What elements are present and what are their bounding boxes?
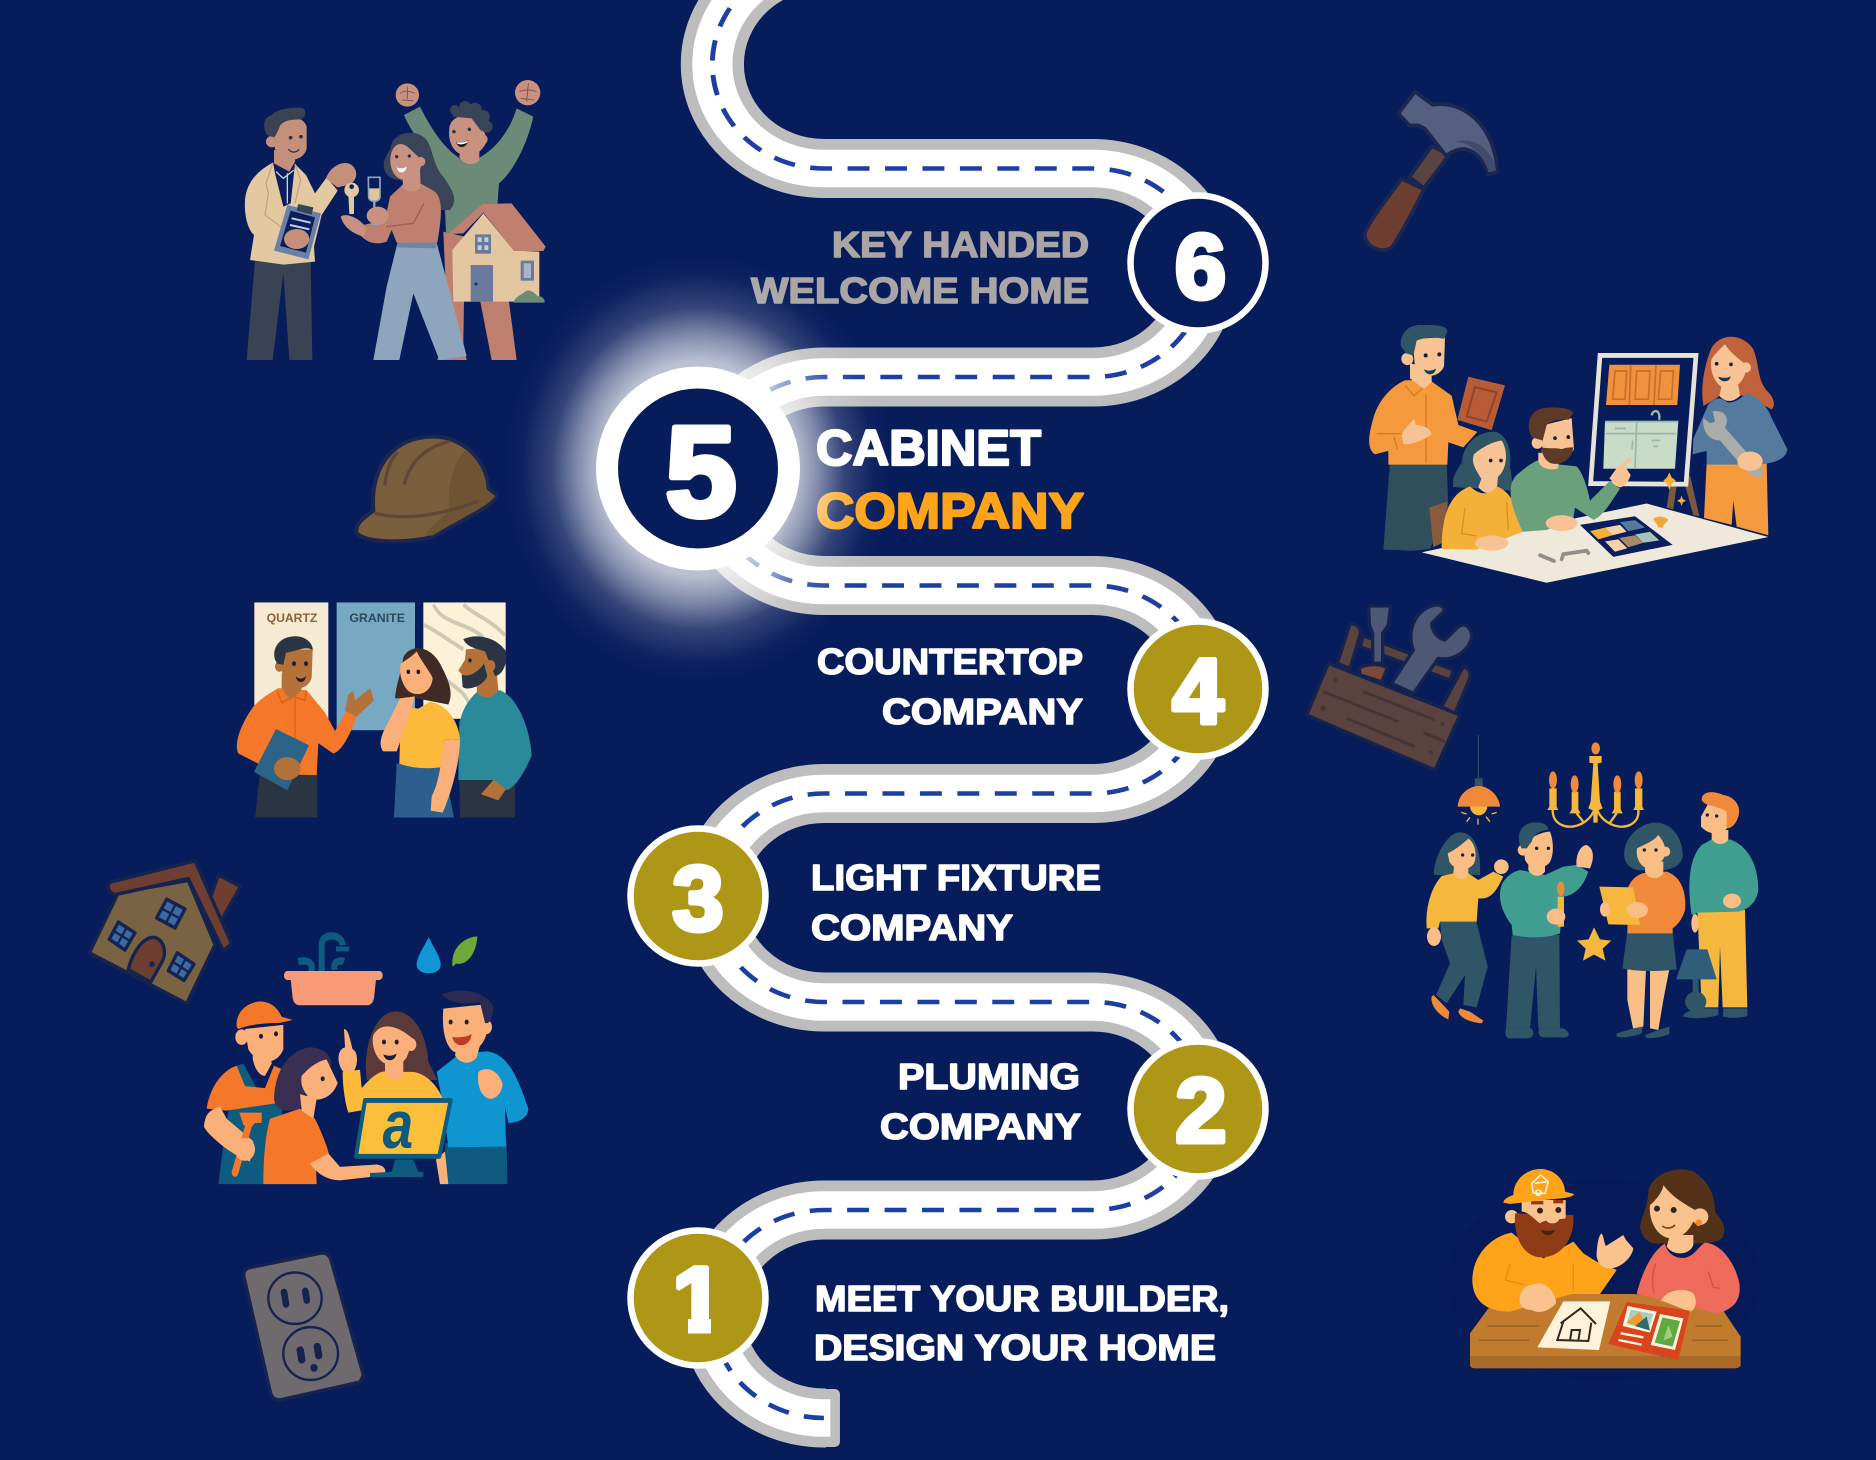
- stone sample panels: [254, 602, 506, 735]
- icon: leaf: [452, 936, 477, 967]
- figure: man in blue: [436, 991, 528, 1184]
- stone sample panels: QUARTZ: [267, 612, 318, 625]
- label step 5: [816, 420, 1084, 539]
- label step 1: [814, 1278, 1229, 1368]
- step 5 marker highlighted: [607, 378, 789, 560]
- figure: seated woman: [1442, 432, 1523, 551]
- figure: advisor: [237, 636, 374, 818]
- label step 6: KEY HANDED: [832, 224, 1089, 265]
- figure: man with door sample: [1369, 325, 1505, 551]
- label step 4: COUNTERTOP: [817, 641, 1083, 682]
- label step 6: [751, 224, 1089, 311]
- icon: table lamp: [1676, 949, 1717, 1012]
- figure: cheering man: [396, 80, 540, 360]
- label step 3: [811, 857, 1101, 948]
- stone sample panels: GRANITE: [349, 612, 405, 625]
- figure: agent with clipboard: [245, 108, 356, 360]
- label step 3: LIGHT FIXTURE: [811, 857, 1101, 898]
- icon: small house: [448, 203, 546, 303]
- figure: woman pointing: [339, 1011, 443, 1113]
- step 1 marker: [630, 1230, 766, 1366]
- figure: plumber: [204, 1002, 293, 1184]
- figure: woman at screen: [263, 1047, 385, 1184]
- material samples booklet: [1608, 1302, 1690, 1360]
- icon: pendant lamp: [1458, 735, 1500, 825]
- icon: water drop: [417, 937, 441, 973]
- chair: [1429, 501, 1447, 547]
- figure: woman in yellow: [1426, 832, 1509, 1023]
- icon: key: [344, 183, 359, 214]
- label step 4: COMPANY: [882, 691, 1083, 732]
- icon: star: [1577, 927, 1611, 961]
- label step 3: COMPANY: [811, 907, 1013, 948]
- step 3 marker: 3: [672, 848, 724, 950]
- figure: bearded man pointing: [1511, 407, 1631, 532]
- work table with samples: [1422, 504, 1768, 583]
- icon: tool box: [1307, 605, 1472, 770]
- step 4 marker: [1130, 622, 1266, 756]
- house blueprint sheet: [1537, 1301, 1610, 1350]
- illustration: light fixture team: [1426, 735, 1758, 1038]
- label step 2: [880, 1056, 1081, 1147]
- label step 2: PLUMING: [898, 1056, 1080, 1097]
- step 3 marker: [630, 828, 766, 964]
- figure: bearded builder: [1472, 1169, 1633, 1312]
- label step 5: CABINET: [816, 420, 1041, 476]
- illustration: countertop selection team: [237, 602, 532, 818]
- label step 1: DESIGN YOUR HOME: [814, 1327, 1216, 1368]
- figure: man with candle: [1500, 822, 1593, 1038]
- label step 2: COMPANY: [880, 1106, 1081, 1147]
- figure: woman client: [1637, 1169, 1740, 1313]
- monitor with logo: [356, 1088, 451, 1177]
- soft shadow: [1447, 1180, 1760, 1380]
- step 2 marker: [1130, 1042, 1266, 1176]
- icon: wall outlet: [244, 1253, 363, 1400]
- figure: woman with tablet: [1599, 823, 1685, 1038]
- illustration: plumbing team: [204, 936, 528, 1184]
- step 5 marker highlighted: 5: [665, 401, 737, 544]
- wooden table: [1470, 1294, 1741, 1368]
- figure: man in teal: [458, 636, 532, 818]
- icon: sink and faucet: [284, 936, 383, 1005]
- figure: tall man: [1683, 792, 1758, 1018]
- step 4 marker: 4: [1172, 641, 1224, 743]
- step 1 marker: 1: [672, 1249, 724, 1351]
- illustration: builder meets client: [1447, 1169, 1760, 1380]
- step 6 marker: 6: [1175, 216, 1226, 318]
- figure: woman with glass: [341, 133, 467, 360]
- label step 1: MEET YOUR BUILDER,: [815, 1278, 1229, 1319]
- illustration: keys handed over: [245, 80, 546, 360]
- label step 6: WELCOME HOME: [751, 270, 1089, 311]
- figure: woman thinking: [381, 648, 460, 818]
- icon: tilted house: [89, 861, 241, 1004]
- label step 5: COMPANY: [816, 483, 1084, 539]
- step 6 marker: [1130, 196, 1266, 330]
- monitor with logo: a: [383, 1088, 413, 1163]
- step 2 marker: 2: [1175, 1060, 1227, 1162]
- figure: woman with wrench: [1693, 337, 1787, 535]
- kitchen concept board: [1591, 355, 1699, 516]
- icon: hard hat: [356, 437, 497, 541]
- illustration: cabinet planning team: [1369, 325, 1787, 583]
- glow behind step 5: [503, 254, 893, 684]
- label step 4: [817, 641, 1083, 732]
- winding road: [712, 0, 1205, 1447]
- icon: chandelier: [1547, 742, 1644, 827]
- icon: hammer: [1365, 92, 1497, 250]
